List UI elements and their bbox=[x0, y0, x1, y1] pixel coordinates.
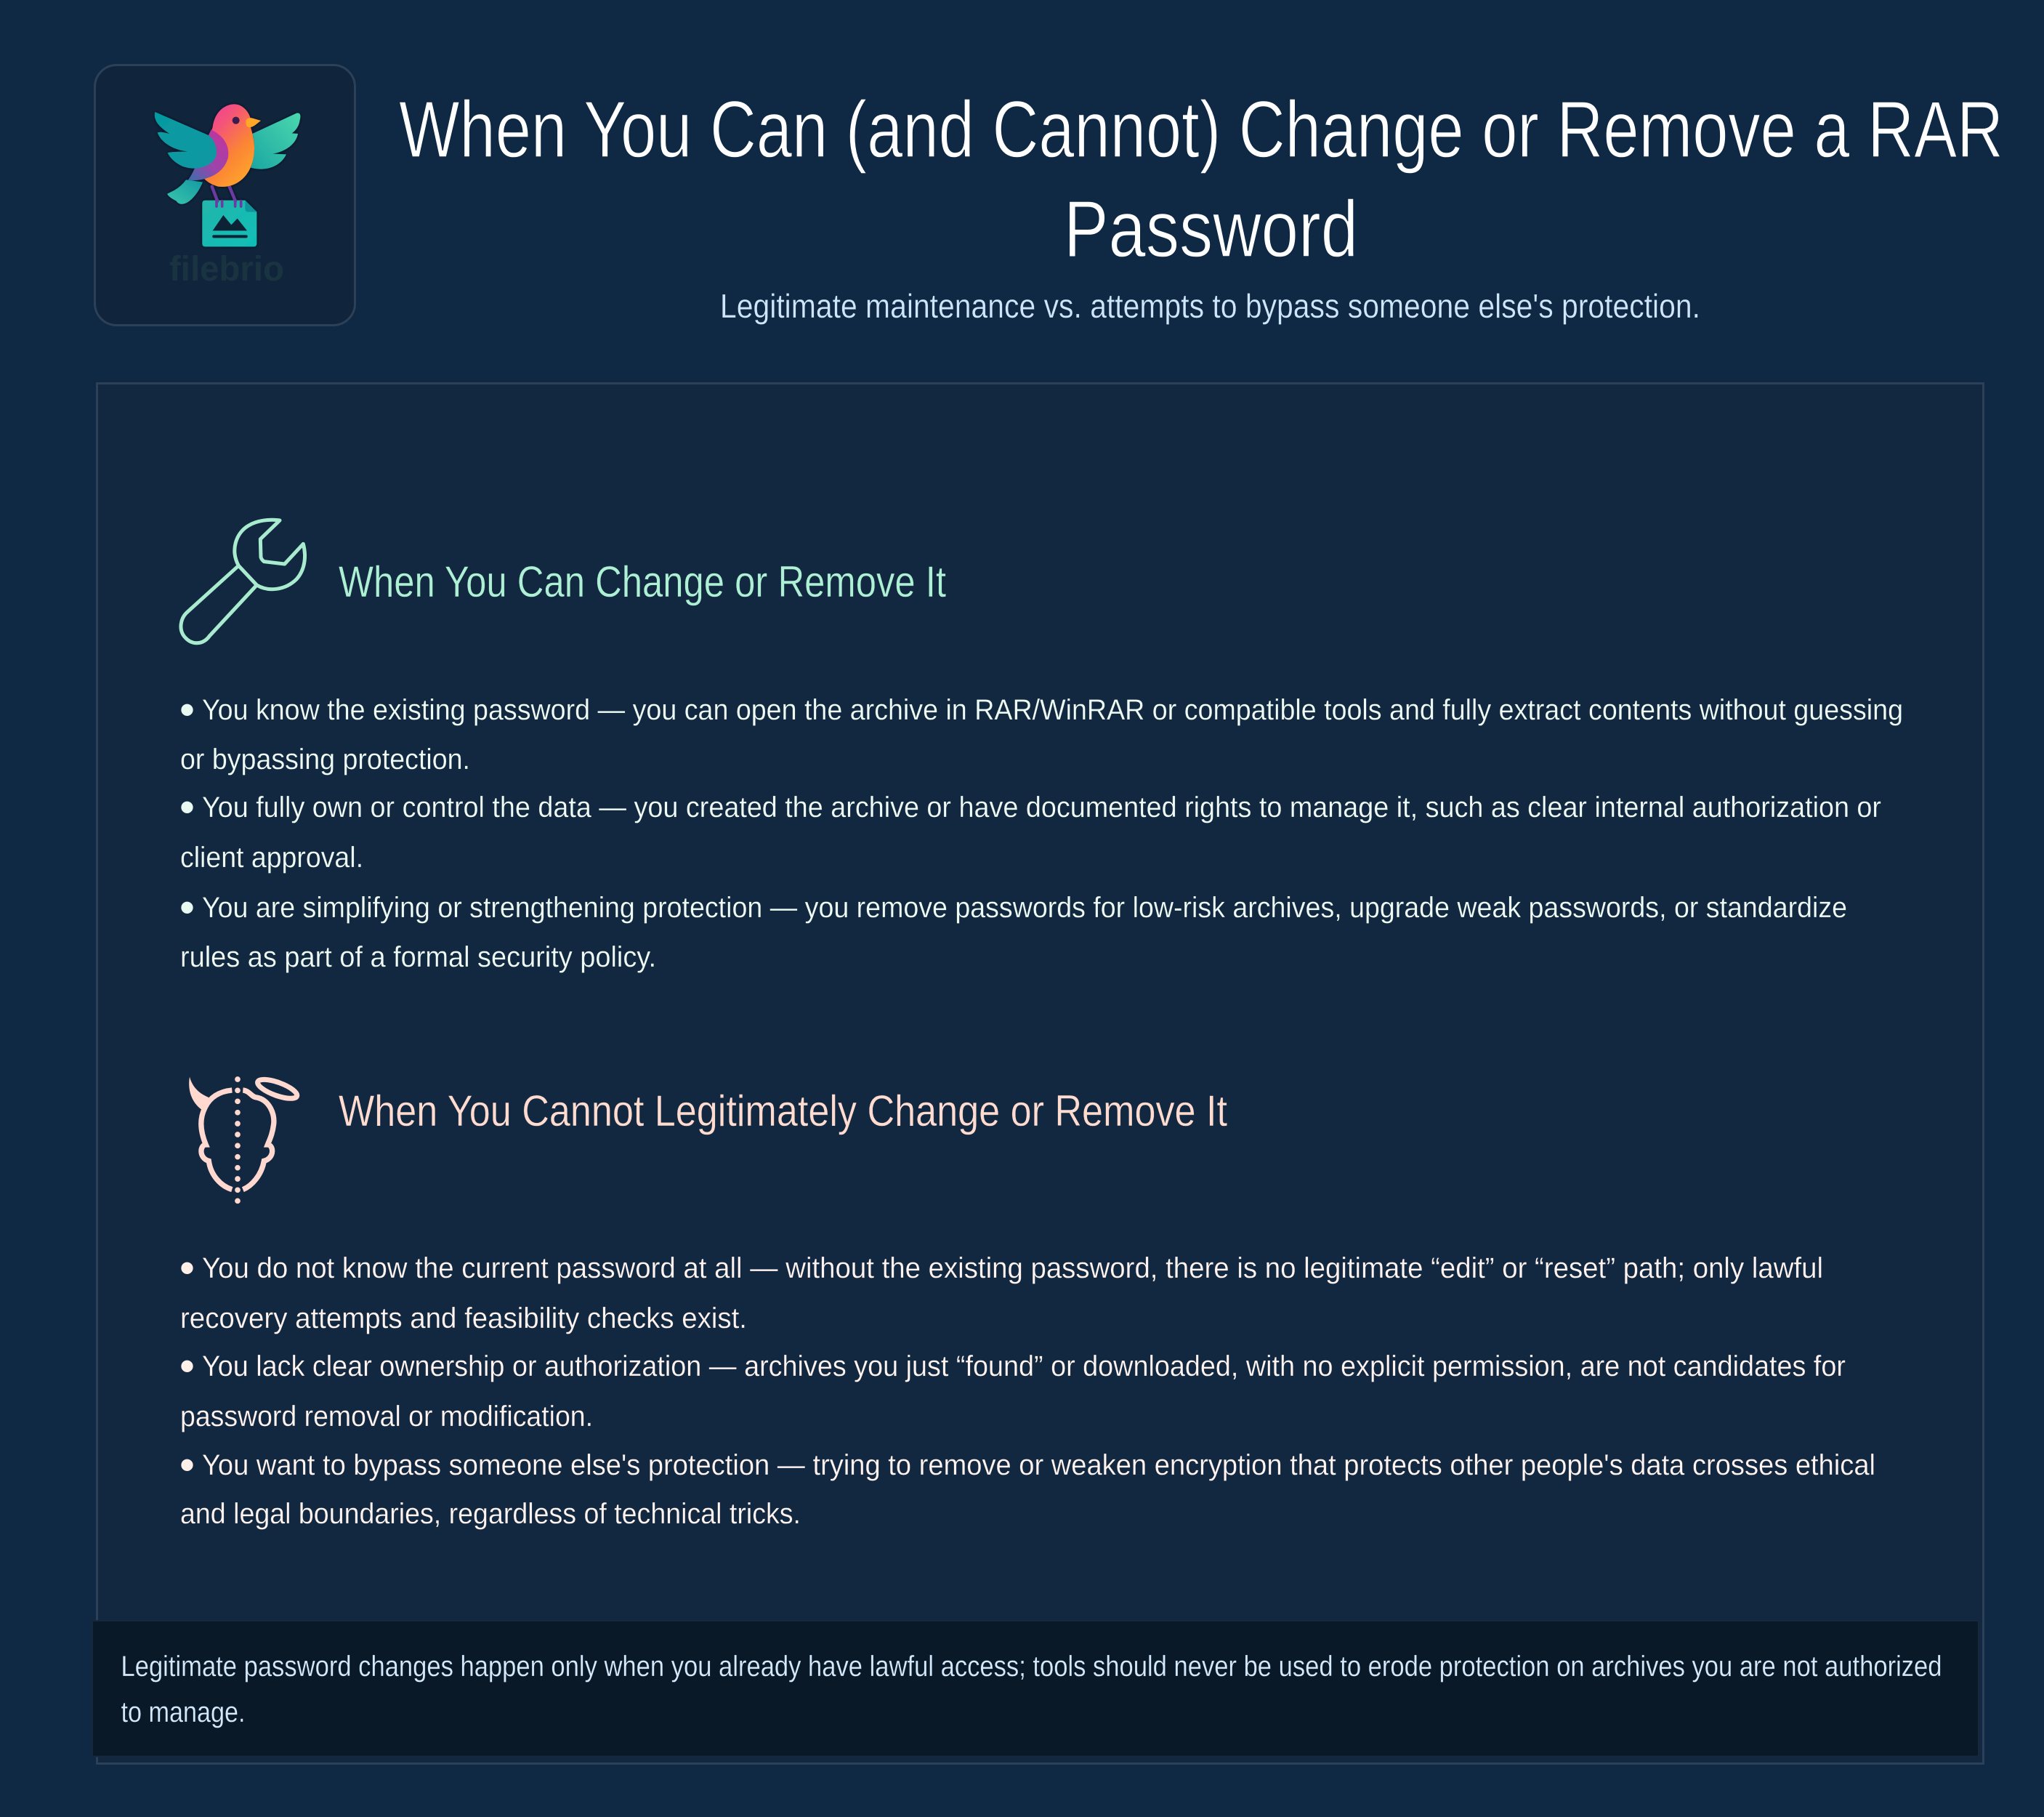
text block: can list: You are simplifying or strengthening protection — you remove passwords for low-risk archives, upgrade weak passwords, or standardize bbox=[202, 892, 1847, 924]
text block: can list bbox=[179, 685, 1903, 973]
text block: cannot list: • bbox=[179, 1342, 195, 1390]
text block: cannot list: You lack clear ownership or authorization — archives you just “found” or downloaded, with no explicit permission, are not candidates for bbox=[202, 1350, 1846, 1382]
text block: cannot list: You want to bypass someone else's protection — trying to remove or weaken encryption that protects other people's data crosses ethical bbox=[202, 1449, 1875, 1481]
text block: can list: • bbox=[179, 883, 195, 932]
text block: cannot list bbox=[179, 1244, 1875, 1530]
callout: footer note bbox=[92, 1621, 1979, 1756]
logo card bbox=[94, 65, 355, 326]
text block: can list: • bbox=[179, 685, 195, 734]
text block: can list: client approval. bbox=[180, 842, 363, 874]
title: Password bbox=[1064, 185, 1358, 274]
section: when you can bbox=[179, 520, 1903, 973]
text block: cannot list: password removal or modification. bbox=[180, 1401, 593, 1433]
text block: cannot list: recovery attempts and feasibility checks exist. bbox=[180, 1302, 747, 1334]
text block: cannot list: • bbox=[179, 1441, 195, 1489]
text block: can list: rules as part of a formal security policy. bbox=[180, 941, 656, 973]
text block: can list: or bypassing protection. bbox=[180, 744, 470, 775]
text block: cannot list: You do not know the current password at all — without the existing password, there is no legitimate “edit” or “reset” path; only lawful bbox=[202, 1252, 1823, 1284]
callout: footer note: to manage. bbox=[121, 1696, 246, 1728]
text block: can list: • bbox=[179, 783, 195, 831]
text block: cannot list: • bbox=[179, 1244, 195, 1292]
text block: can list: You know the existing password — you can open the archive in RAR/WinRAR or compatible tools and fully extract contents without guessing bbox=[202, 694, 1903, 726]
subtitle: Legitimate maintenance vs. attempts to bypass someone else's protection. bbox=[720, 287, 1700, 325]
heading: when you can: When You Can Change or Remove It bbox=[339, 557, 946, 606]
icon: filebrio bird on file bbox=[155, 104, 300, 246]
text block: cannot list: and legal boundaries, regardless of technical tricks. bbox=[180, 1498, 801, 1530]
icon: devil and angel face bbox=[189, 1076, 299, 1204]
heading: when you cannot: When You Cannot Legitimately Change or Remove It bbox=[339, 1087, 1227, 1135]
text block: can list: You fully own or control the data — you created the archive or have documented rights to manage it, such as clear internal authorization or bbox=[202, 791, 1881, 823]
panel: main content bbox=[97, 384, 1984, 1763]
title bbox=[399, 85, 2003, 274]
section: when you cannot bbox=[179, 1076, 1875, 1530]
logo wordmark: filebrio bbox=[169, 250, 284, 289]
icon: wrench bbox=[181, 520, 305, 643]
